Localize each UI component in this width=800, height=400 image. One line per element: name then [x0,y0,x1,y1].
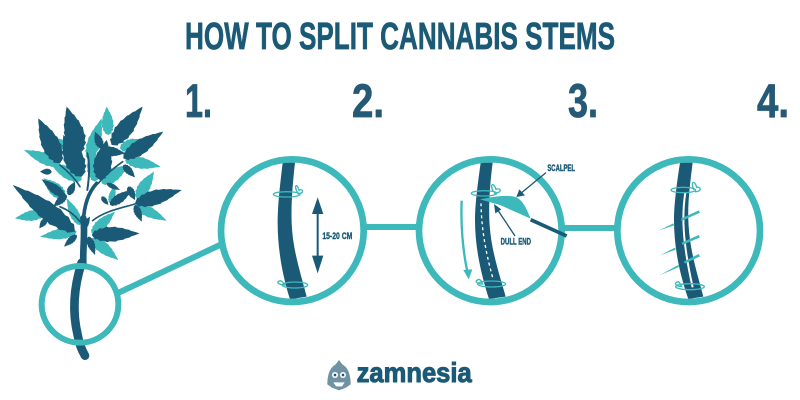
dull end label and pointer: DULL END [501,237,531,247]
logo: zamnesia [327,357,472,390]
cut line [481,203,493,280]
magnifier ring [42,266,118,343]
scalpel [480,196,567,236]
stem [674,163,703,299]
connector lines between circles [118,227,618,293]
step number 1: 1. [185,74,212,127]
scalpel label and pointer [516,163,575,197]
direction arrow [461,201,472,279]
stitches [659,210,700,275]
step number 4: 4. [757,74,789,127]
cannabis plant [7,101,184,356]
ring [419,159,562,302]
ties [471,185,506,287]
step number 2: 2. [352,74,384,127]
double arrow [312,197,323,273]
ties [671,182,704,290]
scalpel label and pointer: SCALPEL [547,163,575,173]
panel: step 2 measure [221,159,364,302]
title: HOW TO SPLIT CANNABIS STEMS [185,16,615,58]
measurement label: 15-20 CM [322,231,352,241]
stem [475,163,506,299]
ring [617,159,760,302]
ties [273,186,308,288]
step number 3: 3. [568,74,598,127]
panel: step 4 stitched stem [617,159,760,302]
panel: step 3 scalpel [419,159,575,302]
split [683,193,693,287]
wordmark: zamnesia [357,357,472,388]
stem [278,163,307,299]
icon: monkey mask [327,360,351,390]
dull end label and pointer [494,204,531,247]
ring [221,159,364,302]
